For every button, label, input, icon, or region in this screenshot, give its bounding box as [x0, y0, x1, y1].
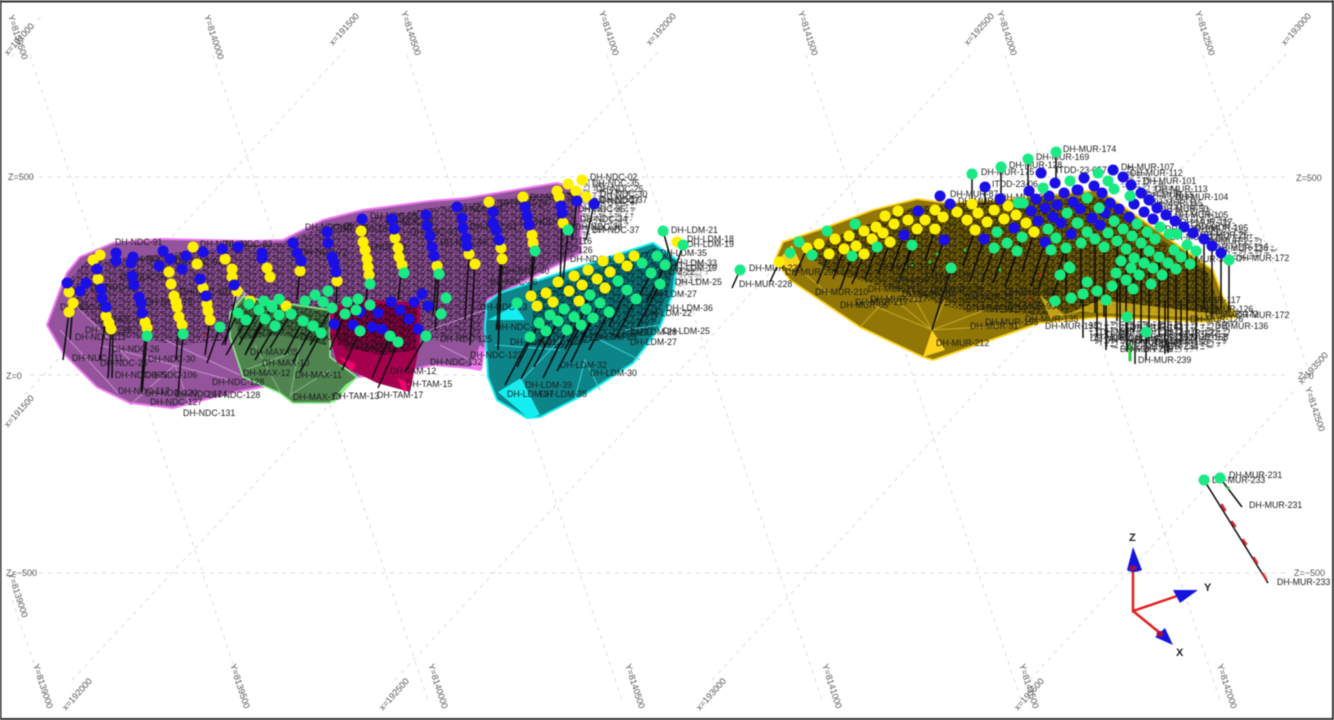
grid axis labels: Z=500 — [8, 172, 34, 182]
drill hole labels: DH-NDC-15 — [305, 222, 353, 232]
drill hole labels: DH-LDM-29 — [590, 332, 637, 342]
drill hole labels: DH-MUR-104 — [1175, 192, 1228, 202]
grid axis labels: Y=8139000 — [31, 663, 55, 710]
drill hole labels: DH-MUR-212 — [936, 338, 989, 348]
drill hole labels: DH-MUR-172 — [1236, 253, 1289, 263]
drill hole labels: DH-NDC-37 — [592, 225, 640, 235]
drill hole labels: DH-MUR-26 — [1200, 230, 1248, 240]
drill hole labels: DH-NDC-124 — [175, 389, 227, 399]
drill hole labels: DH-MUR-128 — [930, 285, 983, 295]
orebody: purple — [47, 183, 581, 408]
drill hole labels: DH-NDC-38 — [575, 222, 623, 232]
drill hole labels: DH-MUR-117 — [1180, 217, 1233, 227]
drill hole labels: DH-MUR-115 — [1150, 198, 1203, 208]
drill hole labels: 116 — [578, 236, 592, 246]
drill hole labels: DH-LDM-25 — [675, 277, 722, 287]
drill hole labels: DH-NDC-88 — [90, 282, 138, 292]
drill hole labels: DH-NDC-24 — [500, 198, 548, 208]
drill hole labels: DH-MUR-50 — [1160, 204, 1208, 214]
orebody: crimson — [330, 298, 420, 392]
drill hole labels: DH-NDC-18 — [340, 224, 388, 234]
drill hole labels: DH-LDM-27 — [650, 289, 697, 299]
drill hole labels: DH-NDC-131 — [183, 408, 235, 418]
drill hole labels: DH-MUR-89 — [958, 196, 1006, 206]
drill hole labels: DH-NDC-117 — [118, 386, 170, 396]
grid axis labels: Z=0 — [1298, 371, 1314, 381]
orebody: gold — [775, 190, 1237, 360]
grid axis labels: x=192500 — [962, 11, 996, 47]
drill hole labels: DH-NDC-48 — [440, 237, 488, 247]
drill hole labels — [60, 144, 1330, 587]
drill hole labels: DH-NDC-02 — [590, 172, 638, 182]
drill hole labels: ITDD-23-06 — [992, 179, 1038, 189]
grid axis labels: Y=8142500 — [1193, 10, 1217, 57]
drill hole labels: DH-LDM-19 — [670, 263, 717, 273]
grid axis labels: Y=8142000 — [1215, 663, 1239, 710]
grid axis labels: Z=0 — [6, 371, 22, 381]
grid axis labels: Y=8139500 — [6, 14, 30, 61]
drill hole labels: DH-MUR-112 — [1130, 168, 1183, 178]
drill hole labels: DH-NDC-44 — [520, 217, 568, 227]
drill hole labels: DH-MUR-136 — [1215, 321, 1268, 331]
drill hole labels: DH-MUR-231 — [1229, 470, 1282, 480]
drill hole labels: DH-LDM-31 — [510, 337, 557, 347]
drill hole labels: DH-MUR-2117 — [870, 294, 928, 304]
drill hole labels: DH-MUR-206 — [1005, 287, 1058, 297]
drill hole labels: DH-MUR-105 — [1195, 223, 1248, 233]
drill hole labels: DH-MAX-10 — [262, 358, 310, 368]
drill hole labels: DH-NDC-35 — [578, 204, 626, 214]
axis triad: X — [1176, 647, 1184, 659]
drill hole labels: DH-MUR-91 — [966, 304, 1014, 314]
drill hole labels: DH-MUR-231 — [880, 262, 933, 272]
drill hole labels: DH-MUR-216 — [895, 275, 948, 285]
drill hole labels: DH-NDC-120 — [145, 388, 197, 398]
drill hole labels: DH-MUR-158 — [1175, 332, 1228, 342]
drill hole labels: DH-MUR-126 — [1190, 314, 1243, 324]
drill hole labels: DH-NDC-80 — [200, 239, 248, 249]
grid axis labels: Y=8142500 — [1303, 386, 1327, 433]
drill hole labels: DH-MUR-172 — [1236, 310, 1289, 320]
drill hole labels: DH-MUR-233 — [1212, 475, 1265, 485]
drill hole labels: DH-MUR-122 — [1170, 232, 1223, 242]
grid axis labels: Y=8141000 — [597, 10, 621, 57]
drill hole labels: DH-LDM-35 — [660, 248, 707, 258]
drill hole labels: DH-TAM-09 — [345, 342, 391, 352]
grid axis labels: Y=8140000 — [426, 663, 450, 710]
drill hole labels: DH-MUR-93 — [1008, 301, 1056, 311]
drill hole labels: DH-NDC-08 — [386, 217, 434, 227]
label clouds outside orebodies — [578, 165, 1280, 352]
grid axis labels: Y=8140500 — [399, 10, 423, 57]
grid axis labels: x=193500 — [1296, 350, 1330, 386]
drill hole labels: DH-MUR-32 — [1180, 254, 1228, 264]
drill hole labels: DH-NDC-101 — [180, 287, 232, 297]
drill hole labels: DH-TAM-12 — [390, 366, 436, 376]
grid axis labels: Y=8141500 — [796, 10, 820, 57]
grid axis labels: Y=8140000 — [202, 14, 226, 61]
drill hole labels: DH-MUR-136 — [1215, 243, 1268, 253]
drill hole labels: DH-MUR-233 — [1277, 577, 1330, 587]
drill hole labels: DH-MUR-108 — [1165, 224, 1218, 234]
drill hole labels: DH-LDM-39 — [525, 380, 572, 390]
drill hole labels: DH-NDC-37 — [600, 195, 648, 205]
grid axis labels: Y=8141500 — [1017, 663, 1041, 710]
drill hole labels: DH-NDC-30 — [600, 189, 648, 199]
drill hole labels: DH-TAM-13 — [333, 391, 379, 401]
drill hole labels: DH-NDC-111 — [75, 332, 126, 342]
drill hole labels: DH-MUR-138 — [1045, 321, 1098, 331]
orebody: green — [230, 297, 357, 403]
grid axis labels: x=191500 — [2, 393, 36, 429]
drill hole labels: DH-LDM-22 — [645, 308, 692, 318]
drill hole labels: DH-LDM-32 — [560, 360, 607, 370]
drill hole labels: DH-MUR-96 — [1000, 192, 1048, 202]
drill hole labels: DH-MUR-195 — [985, 317, 1038, 327]
drill hole labels: DH-NDC-25 — [85, 325, 133, 335]
drill hole labels: DH-LDM-36 — [666, 303, 713, 313]
drill hole labels: DH-LDM-25 — [663, 326, 710, 336]
drill hole labels: DH-MUR-217 — [855, 297, 908, 307]
red and green sample markers — [92, 250, 1266, 579]
drill hole labels: DH-MUR-107 — [1121, 162, 1174, 172]
drill hole labels: DH-MUR-209 — [785, 267, 838, 277]
drill hole labels: DH-LDM-22 — [648, 267, 695, 277]
drill hole labels: DH-LDM-27 — [630, 337, 677, 347]
grid axis labels: x=193000 — [694, 676, 728, 712]
drill hole labels: DH-MUR-142 — [1090, 333, 1143, 343]
drill hole labels: DH-NDC-34 — [580, 214, 628, 224]
drill hole labels: DH-MUR-174 — [1063, 144, 1116, 154]
drill hole labels: DH-MUR-2 — [1205, 236, 1249, 246]
drill hole labels: DH-NDC-105 — [115, 370, 167, 380]
drill hole labels: DH-NDC-51 — [470, 222, 518, 232]
drill hole labels: DH-MUR-91 — [970, 321, 1018, 331]
grid axis labels: x=193500 — [1012, 676, 1046, 712]
drill hole labels: DH-LDM-21 — [671, 225, 718, 235]
drill hole labels: DH-MUR-117 — [1188, 295, 1241, 305]
grid axis labels: x=192000 — [644, 11, 678, 47]
drill hole labels: DH-MUR-113 — [1155, 184, 1208, 194]
drill hole labels: 126 — [578, 245, 593, 255]
drill hole labels: DH-NDC-91 — [115, 237, 163, 247]
drill hole labels: DH-MUR-148 — [1125, 337, 1178, 347]
drill hole labels: DH-MUR-132 — [1165, 328, 1218, 338]
drill hole labels: DH-NDC-46 — [490, 277, 538, 287]
drill hole labels: DH-TAM-15 — [406, 379, 452, 389]
drill hole labels: DH-MUR-105 — [1175, 210, 1228, 220]
drill hole labels: DH-LDM-18 — [687, 234, 734, 244]
drill hole labels: DH-NDC-132 — [430, 357, 482, 367]
drill hole traces — [63, 152, 1268, 583]
drill hole labels: DH-MAX-11 — [295, 370, 342, 380]
drill hole labels: DH-MUR-228 — [749, 263, 802, 273]
axis triad — [1127, 532, 1212, 659]
drill hole labels: DH-MUR-172 — [1205, 309, 1258, 319]
drill hole labels: DH-NDC-13 — [480, 302, 528, 312]
drill hole labels: DH-MUR-175 — [981, 167, 1034, 177]
drill hole labels: DH-MAX-14 — [300, 332, 348, 342]
drill hole labels: DH-MUR-210 — [815, 287, 868, 297]
drill hole labels: DH-LDM-38 — [540, 389, 587, 399]
drill hole labels: DH-NDC-78 — [145, 297, 193, 307]
drill hole labels: DH-MUR-93 — [925, 270, 973, 280]
axis triad: Y — [1204, 582, 1212, 594]
drill hole labels: DH-MAX-10 — [293, 392, 341, 402]
drill hole labels: DH-MUR-155 — [1155, 337, 1208, 347]
grid axis labels: Y=8142000 — [995, 10, 1019, 57]
drill hole labels: DH-MUR-169 — [1036, 152, 1089, 162]
drill hole labels: DH-MUR-145 — [1105, 334, 1158, 344]
drill hole labels: DH-MUR-135 — [1025, 314, 1078, 324]
grid axis labels: Z=−500 — [1294, 568, 1325, 578]
drill hole labels: DH-MUR-101 — [1143, 176, 1196, 186]
drill hole labels: DH-MUR-231 — [1249, 500, 1302, 510]
drill hole labels: DH-MUR-163 — [1130, 322, 1183, 332]
drill hole labels: DH-NDC-29 — [530, 192, 578, 202]
drill hole labels: DH-MUR-207 — [902, 289, 955, 299]
drill hole labels: DH-MUR-215 — [868, 284, 921, 294]
grid axis labels: x=193000 — [1279, 11, 1313, 47]
grid axis labels: x=192000 — [60, 676, 94, 712]
drill hole labels: DH-MUR-06 — [840, 300, 888, 310]
drill hole labels: DH-MUR-128 — [1009, 160, 1062, 170]
drill hole labels: DH-LDM-37 — [507, 389, 554, 399]
drill hole labels: DH-MUR-160 — [1100, 327, 1153, 337]
drill hole labels: DH-MUR-20 — [965, 292, 1013, 302]
drill hole labels: DH-NDC-106 — [145, 370, 197, 380]
grid axis labels: Z=−500 — [6, 568, 37, 578]
grid axis labels: Y=8140500 — [623, 663, 647, 710]
drill hole labels: DH-NDC-117 — [570, 254, 622, 264]
drill hole labels: DH-NDC-30 — [148, 354, 196, 364]
drill hole labels: DH-LDM-28 — [630, 327, 677, 337]
drill hole labels: DH-LDM-30 — [590, 368, 637, 378]
drill hole labels: DH-NDC-84 — [60, 302, 108, 312]
drill hole labels: DH-MUR-233 — [1145, 341, 1198, 351]
drill hole labels: DH-NDC-22 — [455, 204, 503, 214]
drill hole labels: DH-NDC-40 — [502, 266, 550, 276]
collar markers: yellow — [69, 180, 1034, 329]
collar markers: blue — [67, 170, 1221, 329]
drill hole labels: DH-NDC-33 — [410, 227, 458, 237]
drill hole labels: DH-MUR-152 — [1140, 333, 1193, 343]
drill hole labels: DH-MUR-87 — [950, 189, 998, 199]
grid axis labels: x=191000 — [2, 21, 36, 57]
drill hole labels: DH-NDC-97 — [175, 257, 223, 267]
drill hole labels: DH-NDC-127 — [495, 322, 547, 332]
drill hole labels: DH-NDC-127 — [150, 397, 202, 407]
grid axis labels: Y=8139000 — [6, 572, 30, 619]
drill hole labels: DH-NDC-83 — [225, 239, 273, 249]
drill hole labels: ITDD-23-057 — [1056, 165, 1107, 175]
drill hole labels: DH-MUR-126 — [1200, 304, 1253, 314]
grid axis labels: x=192500 — [377, 676, 411, 712]
drill hole labels: DH-NUC-111 — [72, 353, 123, 363]
grid axis labels: Y=8141000 — [820, 663, 844, 710]
drill hole labels: DH-MUR-248 — [1120, 344, 1173, 354]
drill hole labels: DH-MAX-12 — [243, 368, 291, 378]
drill hole labels: DH-NDC-125 — [440, 334, 492, 344]
drill hole labels: DH-NDC-61 — [360, 242, 408, 252]
drill hole labels: DH-LDM-33 — [670, 258, 717, 268]
orebody: cyan — [485, 243, 677, 418]
collar markers: green — [147, 152, 1229, 480]
drill hole labels: DH-MUR-239 — [1138, 355, 1191, 365]
drill hole labels: DH-NDC-72 — [300, 247, 348, 257]
axis triad: Z — [1129, 532, 1136, 544]
drill hole labels: DH-NDC-35 — [592, 178, 640, 188]
drill hole labels: DH-NDC-05 — [370, 211, 418, 221]
drill hole labels: DH-NDC-123 — [470, 350, 522, 360]
grid axis labels: Z=500 — [1296, 173, 1322, 183]
drill hole labels: DH-MUR-228 — [739, 279, 792, 289]
drill hole labels: DH-NDC-128 — [208, 390, 260, 400]
drill hole labels: DH-NDC-25 — [596, 184, 644, 194]
grid axis labels: Y=8139500 — [228, 663, 252, 710]
drill hole labels: DH-MAX-08 — [250, 347, 298, 357]
drill hole labels: DH-NDC-93 — [130, 254, 178, 264]
grid axis labels: x=191500 — [327, 11, 361, 47]
drill hole labels: DH-LDM-19 — [687, 239, 734, 249]
drill hole labels: DH-NDC-128 — [212, 377, 264, 387]
drill hole labels: DH-MUR-55 — [1146, 190, 1194, 200]
drill hole labels: DH-TAM-17 — [377, 390, 423, 400]
drill hole labels: DH-NDC-26 — [100, 358, 148, 368]
drill hole labels: DH-NDC-99 — [120, 272, 168, 282]
drill hole labels: DH-NDC-08 — [98, 314, 146, 324]
drill hole labels: DH-NDC-37 — [592, 196, 640, 206]
drill hole labels: DH-NDC-26 — [112, 344, 160, 354]
